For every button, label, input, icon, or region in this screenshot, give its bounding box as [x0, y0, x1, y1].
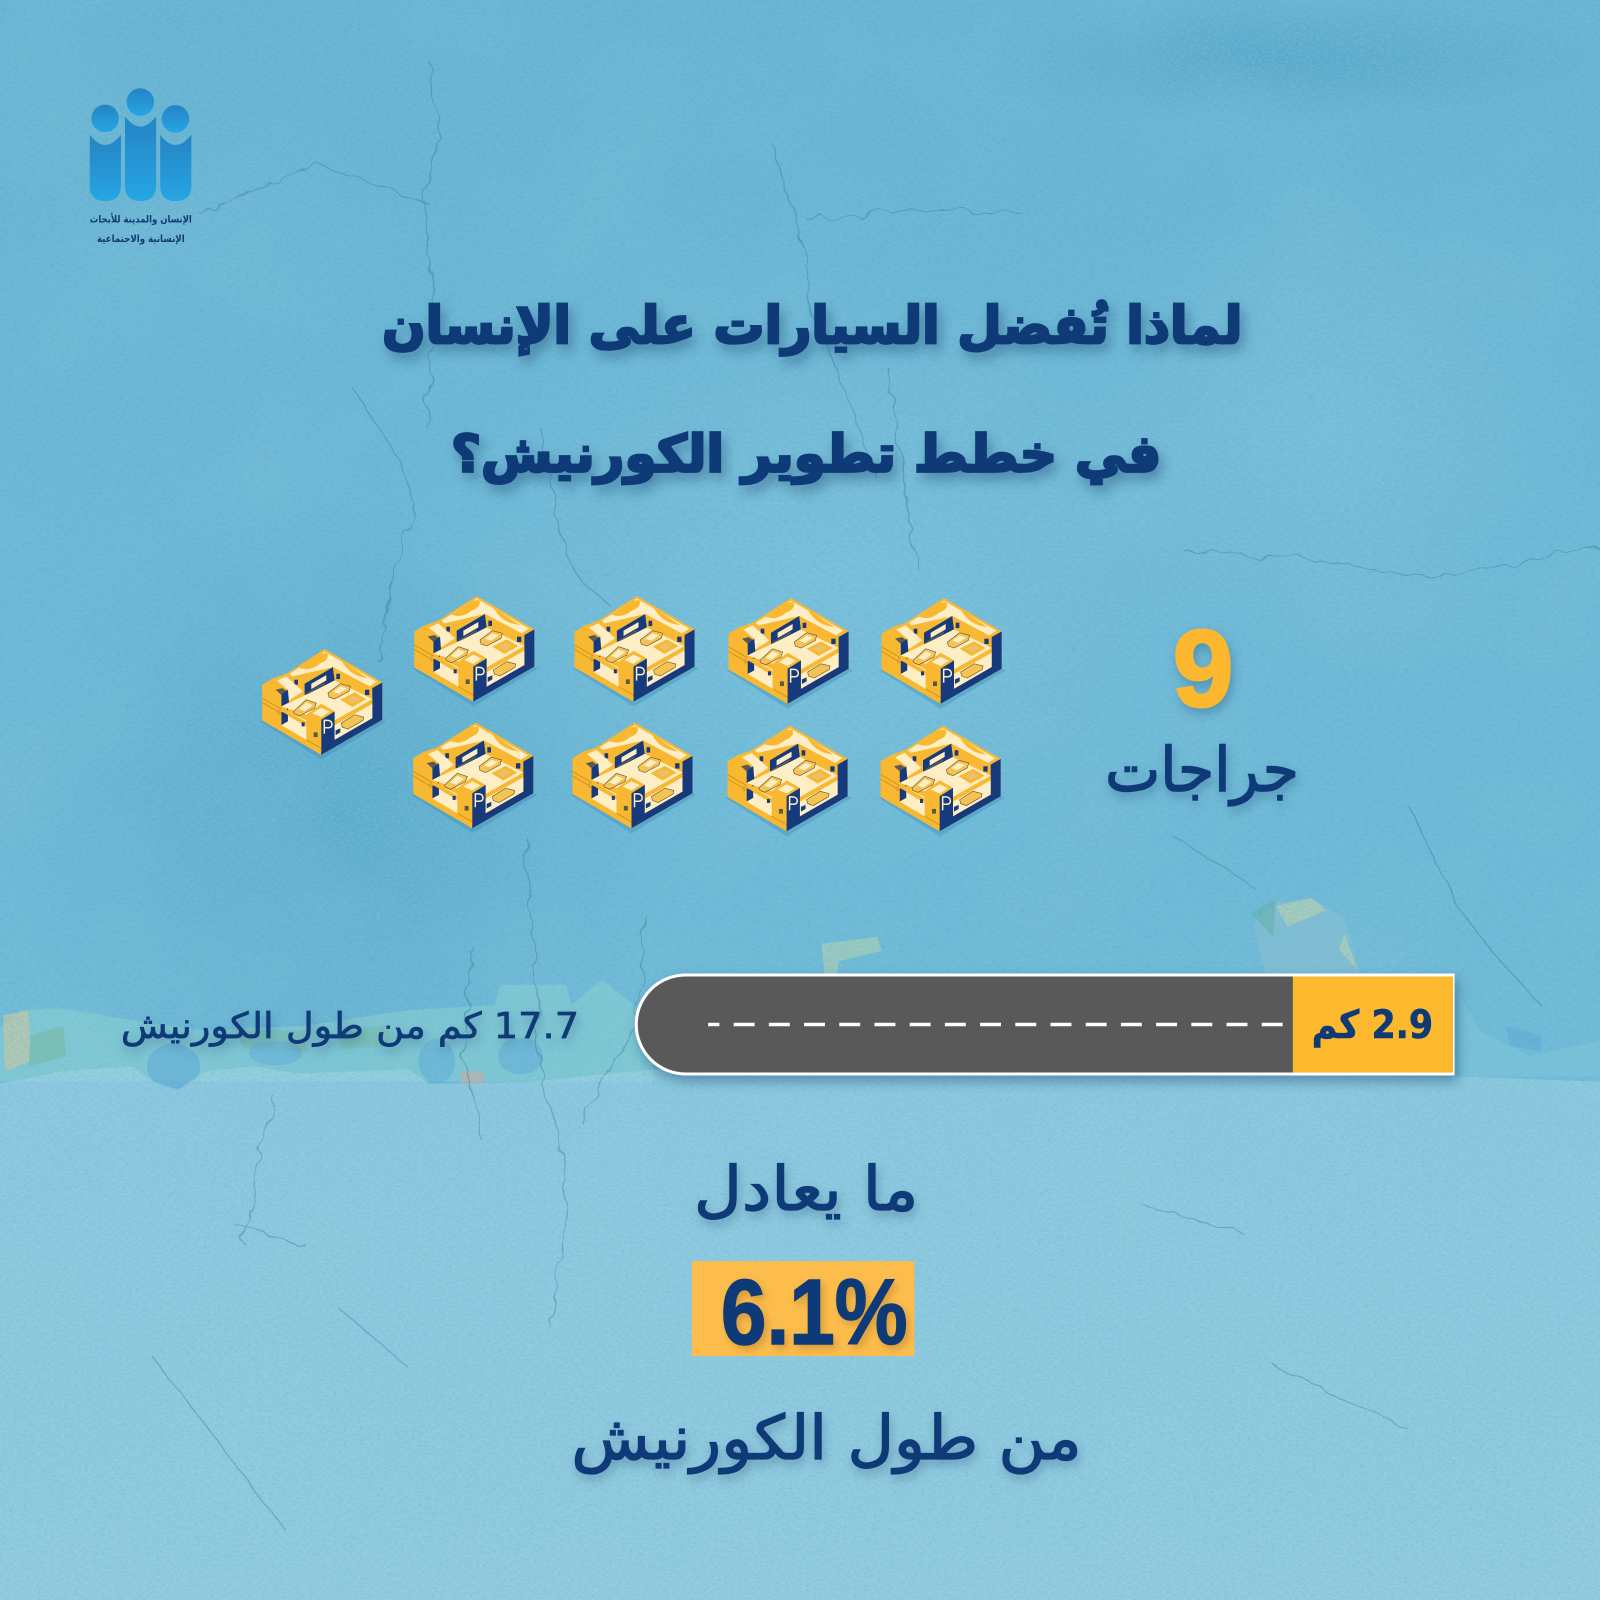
corniche length label: 17.7 كم من طول الكورنيش	[121, 1006, 579, 1047]
logo name line 1: الإنسان والمدينة للأبحاث	[90, 212, 192, 225]
label: garages: جراجات	[1105, 735, 1299, 806]
yellow box	[692, 1261, 914, 1356]
yellow length segment	[1293, 977, 1453, 1072]
icon: garage 5	[879, 726, 1005, 836]
equals label: ما يعادل	[694, 1154, 918, 1225]
value: 2.9 km: 2.9 كم	[1312, 1003, 1433, 1048]
icon: garage 4	[412, 596, 538, 707]
icon: garage 3	[573, 596, 699, 707]
road dashes	[708, 1023, 1286, 1026]
icon: garage 7	[570, 723, 697, 833]
of corniche length label: من طول الكورنيش	[571, 1403, 1082, 1474]
title	[382, 297, 1242, 484]
lower plaster area	[0, 1066, 1600, 1600]
map strip: corniche coastline	[0, 898, 1600, 1089]
logo	[90, 88, 192, 245]
icon: garage 8	[411, 723, 537, 833]
icon: garage 2	[727, 598, 853, 709]
title line 1: لماذا تُفضل السيارات على الإنسان	[382, 297, 1242, 356]
icon: three figures	[90, 88, 191, 201]
icon: garage 1	[880, 598, 1006, 709]
garage icons grid	[260, 596, 1006, 836]
garage count stat	[1105, 608, 1299, 806]
icon: garage 6	[726, 726, 852, 836]
logo name line 2: الإنسانية والاجتماعية	[97, 234, 185, 245]
value: 6.1%	[721, 1260, 908, 1364]
road body	[636, 975, 1453, 1074]
road bar	[636, 975, 1453, 1074]
icon: garage 9	[260, 649, 386, 760]
number 9: 9	[1173, 608, 1233, 729]
title line 2: في خطط تطوير الكورنيش؟	[451, 425, 1161, 484]
percentage callout	[692, 1260, 914, 1364]
